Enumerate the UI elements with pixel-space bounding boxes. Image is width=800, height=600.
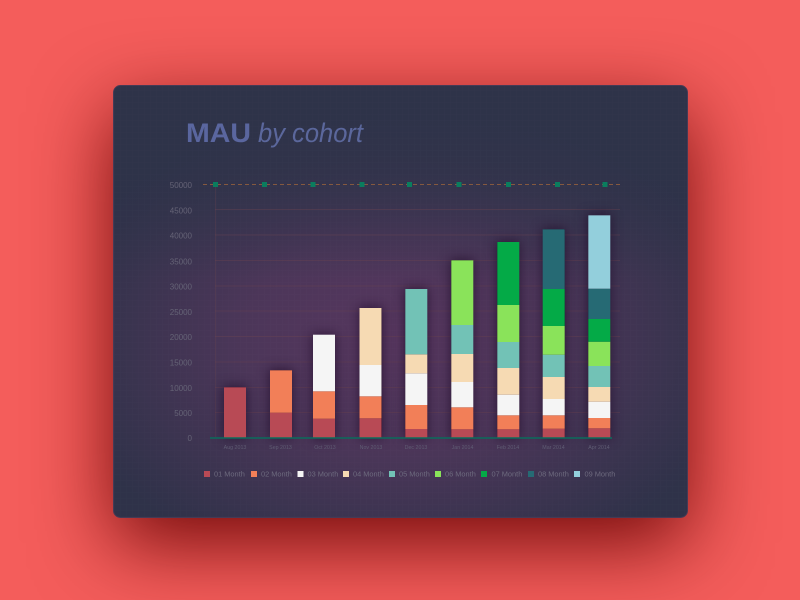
bar: Feb 2014 bbox=[497, 242, 519, 438]
y axis labels: 25000 bbox=[170, 308, 193, 317]
target line with markers bbox=[203, 182, 620, 187]
legend item: 06 Month: 06 Month bbox=[445, 470, 476, 478]
x axis labels: Nov 2013 bbox=[360, 445, 382, 451]
title: by cohort bbox=[258, 118, 364, 148]
y axis labels: 10000 bbox=[170, 384, 193, 393]
title: MAU bbox=[186, 118, 251, 148]
y axis labels: 30000 bbox=[170, 282, 193, 292]
bar: Oct 2013 bbox=[313, 335, 335, 438]
x axis labels: Dec 2013 bbox=[405, 445, 427, 451]
x axis labels: Jan 2014 bbox=[452, 445, 473, 451]
legend item: 09 Month: 09 Month bbox=[584, 470, 615, 478]
legend item: 07 Month: 07 Month bbox=[492, 470, 522, 478]
legend item: 05 Month: 05 Month bbox=[399, 470, 430, 478]
bar: Dec 2013 bbox=[405, 289, 427, 438]
card surface bbox=[114, 86, 688, 518]
y axis labels: 15000 bbox=[170, 358, 193, 368]
bar: Mar 2014 bbox=[543, 229, 565, 438]
bar: Aug 2013 bbox=[224, 387, 246, 438]
bar: Sep 2013 bbox=[270, 370, 292, 438]
y axis labels: 20000 bbox=[170, 333, 193, 342]
legend bbox=[204, 470, 615, 478]
x axis labels bbox=[224, 445, 610, 451]
legend item: 01 Month: 01 Month bbox=[214, 470, 245, 478]
card drop shadow bbox=[114, 86, 687, 517]
x axis labels: Sep 2013 bbox=[269, 445, 292, 451]
legend item: 03 Month: 03 Month bbox=[308, 470, 338, 478]
x axis line bbox=[210, 437, 612, 439]
legend item: 04 Month: 04 Month bbox=[353, 470, 384, 478]
y axis labels: 45000 bbox=[170, 206, 193, 215]
x axis labels: Feb 2014 bbox=[497, 445, 519, 451]
y axis labels: 0 bbox=[188, 434, 193, 443]
x axis labels: Oct 2013 bbox=[314, 445, 336, 451]
title bbox=[186, 118, 364, 148]
bar: Nov 2013 bbox=[360, 308, 382, 438]
x axis labels: Aug 2013 bbox=[224, 445, 246, 451]
bar: Apr 2014 bbox=[588, 215, 610, 438]
y axis labels: 5000 bbox=[174, 409, 193, 418]
grid lines bbox=[215, 184, 620, 437]
bar: Jan 2014 bbox=[451, 260, 473, 438]
legend item: 02 Month: 02 Month bbox=[261, 470, 292, 478]
x axis labels: Apr 2014 bbox=[588, 445, 610, 451]
x axis labels: Mar 2014 bbox=[542, 445, 565, 451]
y axis labels: 50000 bbox=[170, 181, 193, 190]
y axis labels: 35000 bbox=[170, 257, 193, 266]
legend item: 08 Month: 08 Month bbox=[538, 470, 569, 478]
y axis labels bbox=[170, 181, 193, 443]
y axis labels: 40000 bbox=[170, 232, 193, 241]
